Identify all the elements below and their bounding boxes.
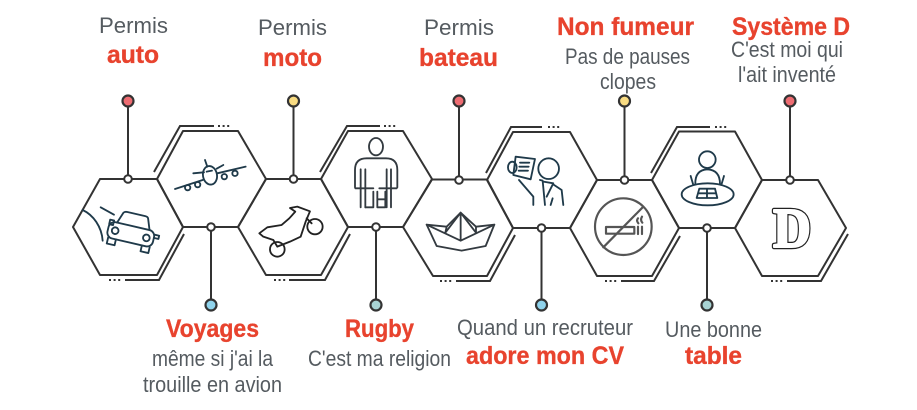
label: voyages: même si j'ai la bbox=[152, 346, 274, 371]
connector: permis bateau bbox=[454, 96, 464, 184]
label: permis moto: moto bbox=[263, 44, 322, 72]
connector: permis auto bbox=[122, 96, 134, 183]
connector: permis moto bbox=[288, 96, 299, 183]
label: table: Une bonne bbox=[665, 317, 762, 342]
connector: non fumeur bbox=[619, 96, 630, 184]
label: systeme D: Système D bbox=[732, 13, 850, 41]
hexagon 8: table bbox=[651, 127, 762, 228]
hexagon 7: non fumeur bbox=[570, 180, 680, 281]
label: cv bbox=[457, 315, 633, 370]
connector: cv bbox=[536, 224, 547, 310]
label: voyages: Voyages bbox=[166, 315, 259, 343]
label: non fumeur: Pas de pauses bbox=[565, 44, 690, 69]
label: permis bateau: Permis bbox=[424, 15, 494, 40]
label: table: table bbox=[685, 342, 742, 370]
label: non fumeur: Non fumeur bbox=[557, 13, 694, 41]
connector: table bbox=[702, 224, 712, 310]
connector: rugby bbox=[370, 223, 382, 310]
label: systeme D bbox=[731, 13, 850, 87]
icon: plane bbox=[175, 160, 246, 190]
label: cv: Quand un recruteur bbox=[457, 315, 633, 340]
connector: systeme D bbox=[784, 96, 796, 184]
label: table bbox=[665, 317, 762, 370]
label: permis bateau: bateau bbox=[419, 44, 498, 72]
icon: paper boat bbox=[427, 213, 494, 251]
hexagon 2: voyages bbox=[154, 126, 266, 227]
label: voyages bbox=[143, 315, 282, 397]
icon: no smoking bbox=[595, 198, 652, 255]
icon: man presenting cv bbox=[508, 157, 563, 205]
icon: man with crutches bbox=[355, 138, 397, 207]
hexagon 9: systeme D bbox=[735, 180, 848, 281]
icon: letter D: D bbox=[773, 198, 811, 260]
label: rugby: Rugby bbox=[345, 315, 414, 343]
label: permis bateau bbox=[419, 15, 498, 72]
icon: motorcycle bbox=[259, 207, 323, 257]
connector: voyages bbox=[206, 223, 216, 310]
label: rugby: C'est ma religion bbox=[308, 346, 451, 371]
icon: car bbox=[83, 207, 163, 255]
label: permis auto: Permis bbox=[99, 13, 168, 38]
label: voyages: trouille en avion bbox=[143, 372, 282, 397]
label: permis auto bbox=[99, 13, 168, 69]
icon: person at table bbox=[682, 151, 734, 205]
label: permis moto: Permis bbox=[258, 15, 327, 40]
icon: letter D: D bbox=[773, 198, 811, 260]
label: cv: adore mon CV bbox=[466, 342, 624, 370]
label: non fumeur bbox=[557, 13, 694, 94]
label: non fumeur: clopes bbox=[600, 69, 656, 94]
hexagon 3: moto bbox=[238, 179, 350, 280]
label: permis moto bbox=[258, 15, 327, 72]
label: rugby bbox=[308, 315, 451, 371]
hexagon 1: auto bbox=[73, 179, 184, 280]
hexagon 5: bateau bbox=[403, 180, 515, 281]
label: systeme D: l'ait inventé bbox=[738, 62, 836, 87]
label: systeme D: C'est moi qui bbox=[731, 37, 843, 62]
label: permis auto: auto bbox=[107, 41, 159, 69]
hexagon 6: cv bbox=[486, 127, 597, 228]
hexagon 4: rugby bbox=[320, 126, 432, 227]
